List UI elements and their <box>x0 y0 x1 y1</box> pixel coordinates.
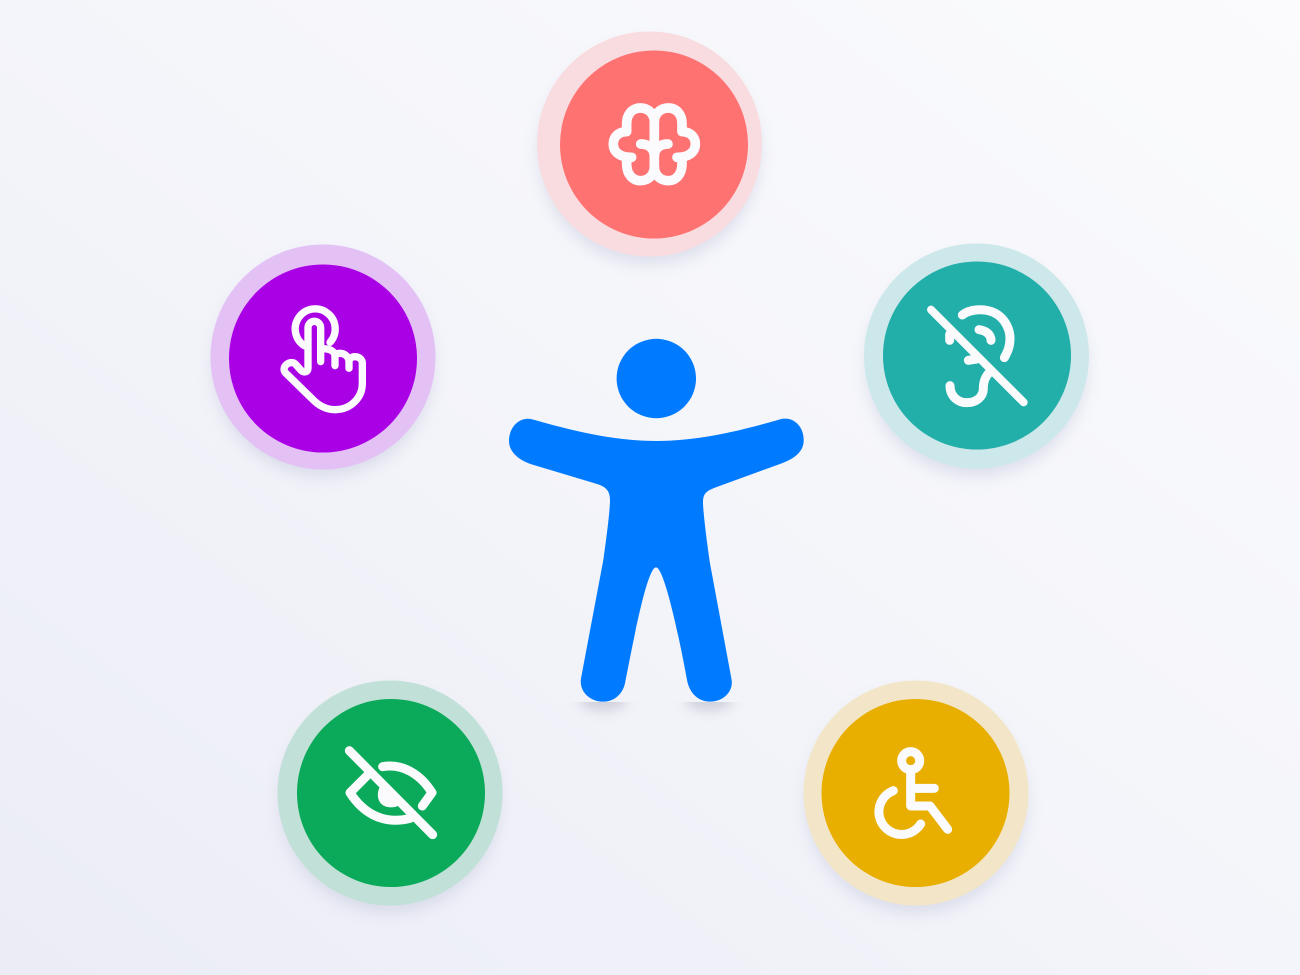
badge: mobility (wheelchair) <box>804 680 1028 913</box>
person head <box>617 339 696 418</box>
badge: hearing (crossed ear) <box>864 244 1089 476</box>
icon: pointing hand <box>284 309 362 410</box>
badge: motor (pointing hand) <box>210 244 436 477</box>
icon: brain <box>613 108 695 181</box>
person body <box>509 419 804 702</box>
foot shadows <box>578 702 734 716</box>
icon: wheelchair <box>879 752 948 834</box>
icon: crossed ear <box>931 310 1024 403</box>
badge: visual (crossed eye) <box>278 680 502 913</box>
badge: cognitive (brain) <box>537 32 762 264</box>
person figure <box>509 339 804 711</box>
icon: crossed eye <box>349 751 433 835</box>
